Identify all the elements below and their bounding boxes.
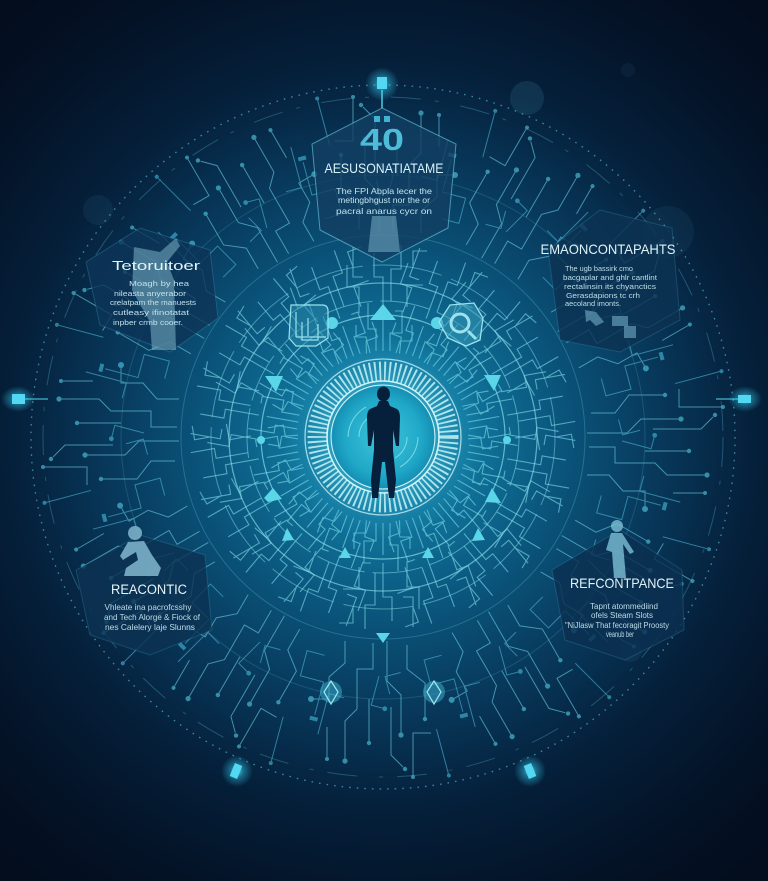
circuit network	[30, 84, 736, 790]
panel body: and Tech Alorge & Fiock of	[104, 612, 201, 622]
panel body	[104, 602, 201, 632]
panel body: The ugb bassirk cmo	[565, 264, 633, 273]
panel: top assessment	[312, 108, 456, 262]
panel body: nileasta anyerabor	[114, 289, 187, 298]
panel body: Gerasdapions tc crh	[566, 291, 640, 300]
panel body: pacral anarus cycr on	[336, 206, 432, 216]
panel body: The FPI Abpla lecer the	[336, 186, 432, 196]
ring markers	[257, 304, 511, 643]
node: bottom right	[514, 755, 546, 787]
bottom triangle	[376, 633, 390, 643]
panel body: rectalinsin its chyanctics	[564, 282, 656, 291]
icon: bottom left lamp	[320, 681, 342, 704]
panel: bottom right	[552, 520, 684, 660]
panel shape	[312, 108, 456, 262]
icon: gear circle	[439, 303, 483, 346]
panel body	[565, 602, 669, 639]
icon: circuit board	[289, 305, 328, 346]
outer dotted rings	[31, 85, 735, 789]
panel body: ofels Steam Slots	[591, 611, 653, 620]
panel shape	[548, 210, 680, 352]
panel heading: AESUSONATIATAME	[324, 160, 444, 176]
panel heading: REFCONTPANCE	[570, 575, 674, 591]
panel heading: REACONTIC	[111, 582, 187, 597]
panel body: crelatpam the manuests	[110, 298, 196, 307]
panel body	[336, 186, 432, 216]
core disc	[332, 386, 434, 488]
panel body: metingbhgust nor the or	[338, 195, 430, 205]
core arcs	[348, 407, 418, 467]
panel heading: Tetoruitoer	[112, 258, 201, 273]
number 40	[360, 116, 404, 157]
panel shape	[86, 228, 218, 352]
top triangle	[370, 304, 396, 320]
panel body: Moagh by hea	[129, 279, 190, 288]
icon ghost	[585, 310, 636, 338]
hub halo	[279, 333, 487, 541]
ring outlines	[305, 359, 461, 515]
panel body: bacgaplar and ghlr cantlint	[563, 273, 658, 282]
number icon	[374, 116, 390, 122]
panel body: nes Calelery laje Slunns	[105, 622, 195, 632]
diamond markers	[257, 317, 511, 558]
node: left	[1, 386, 48, 412]
tick ring	[317, 371, 449, 503]
node: top	[365, 67, 399, 108]
panel body: inpber crmb cooer.	[113, 318, 183, 327]
inner circuit traces	[186, 242, 580, 632]
figure ghost	[120, 526, 161, 576]
icon: bottom right lamp	[423, 681, 445, 704]
panel body: Vhleate ina pacrofcsshy	[104, 602, 192, 612]
number 40: 40	[360, 122, 404, 157]
panel body: cutleasy ifinotatat	[113, 308, 190, 317]
panel shape	[76, 535, 212, 655]
panel body: aecoland imonts.	[565, 299, 621, 308]
figure ghost	[132, 238, 180, 350]
figure ghost	[368, 216, 400, 252]
panel shape	[552, 530, 684, 660]
inner rings	[211, 265, 555, 609]
bokeh lights	[83, 63, 694, 662]
panel body	[563, 264, 658, 308]
node: bottom left	[221, 755, 253, 787]
panel body	[110, 279, 196, 327]
panel body: "NiJlasw That fecoragit Proosty	[565, 621, 669, 630]
figure ghost	[606, 520, 634, 578]
panel heading: EMAONCONTAPAHTS	[540, 241, 676, 257]
panel body: Tapnt atommediind	[590, 602, 658, 611]
panel body: veanub ber	[606, 630, 634, 639]
node: right	[716, 386, 762, 412]
panel: bottom left	[76, 526, 212, 655]
central hub	[279, 333, 487, 541]
outer circuit traces	[30, 84, 736, 790]
central human silhouette	[367, 386, 400, 498]
panel: right	[540, 210, 680, 352]
panel: left	[86, 228, 218, 352]
